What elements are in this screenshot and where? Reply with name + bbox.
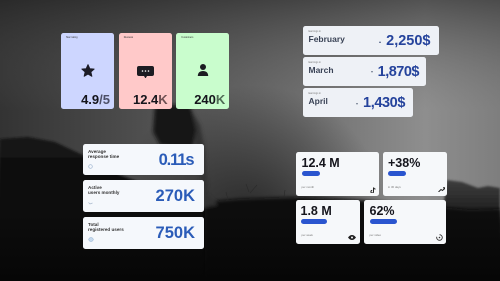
value: 240K: 240K [194,92,225,107]
value: 1,870$: 1,870$ [378,64,419,80]
caption: reviews: Reviews [124,36,133,38]
value: 2,250$: 2,250$ [386,32,430,48]
label: total registered users [88,222,124,232]
arrow: down [356,102,358,104]
panel: earnings April [302,88,413,117]
panel: earnings February [302,26,438,55]
month: April: April [308,96,328,106]
label: active users monthly: Active [88,185,102,190]
tag pill [388,170,406,176]
panel: +38% in 30 days [382,152,446,196]
label: earnings in: Earnings in [308,30,321,32]
icon: speech bubble [137,66,154,78]
icon: clock [88,164,93,169]
value: 4.9/5: 4.9/5 [81,92,110,107]
tag pill [301,218,326,224]
tag pill [302,170,320,176]
panel: reviews card [119,32,172,109]
panel: 62% per video [364,200,446,244]
note: per week: per week [302,233,313,237]
label: average response time: Average [88,148,106,154]
panel: earnings March [302,57,426,86]
label: average response time: response time [88,154,119,159]
note: in 30 days: in 30 days [388,185,401,189]
value: 62%: 62% [370,204,395,218]
value: 1,430$: 1,430$ [363,94,405,110]
label: average response time [88,148,119,159]
icon: activity line [88,202,92,204]
value: 12.4K: 12.4K [133,92,168,107]
arrow: down [370,71,372,73]
value: 270K: 270K [156,187,195,205]
caption: star rating: Star rating [66,36,78,38]
panel: average response time [83,144,204,175]
icon: user group [88,237,94,242]
value: 0.11s: 0.11s [159,150,194,168]
note: per month: per month [302,185,314,189]
panel: total registered users [83,217,204,248]
panel: 12.4M per month [296,152,379,196]
icon: progress ring [436,234,443,241]
value: 12.4M: 12.4 M [302,156,340,170]
label: active users monthly [88,185,120,195]
icon: music note [370,187,376,193]
panel: customers card [176,32,229,109]
icon: star [81,64,95,77]
value: 750K: 750K [156,224,195,242]
icon: person [198,64,208,76]
icon: trending up arrow [438,187,445,192]
tag pill [370,218,396,224]
panel: 1.8M per week [296,200,360,244]
note: per video: per video [370,233,381,237]
arrow: up [379,40,381,42]
month: March: March [308,64,334,74]
caption: customers: Customers [181,36,193,38]
panel: star rating card [61,32,114,109]
label: earnings in: Earnings in [308,92,321,94]
icon: eye [348,235,356,240]
label: earnings in: Earnings in [308,60,321,64]
value: +38%: +38% [388,156,420,170]
month: February: February [308,34,345,44]
value: 1.8M: 1.8 M [300,204,332,218]
label: total registered users: Total [88,222,99,227]
label: total registered users: registered users [88,227,124,232]
label: active users monthly: users monthly [88,190,119,195]
panel: active users monthly [83,180,204,212]
